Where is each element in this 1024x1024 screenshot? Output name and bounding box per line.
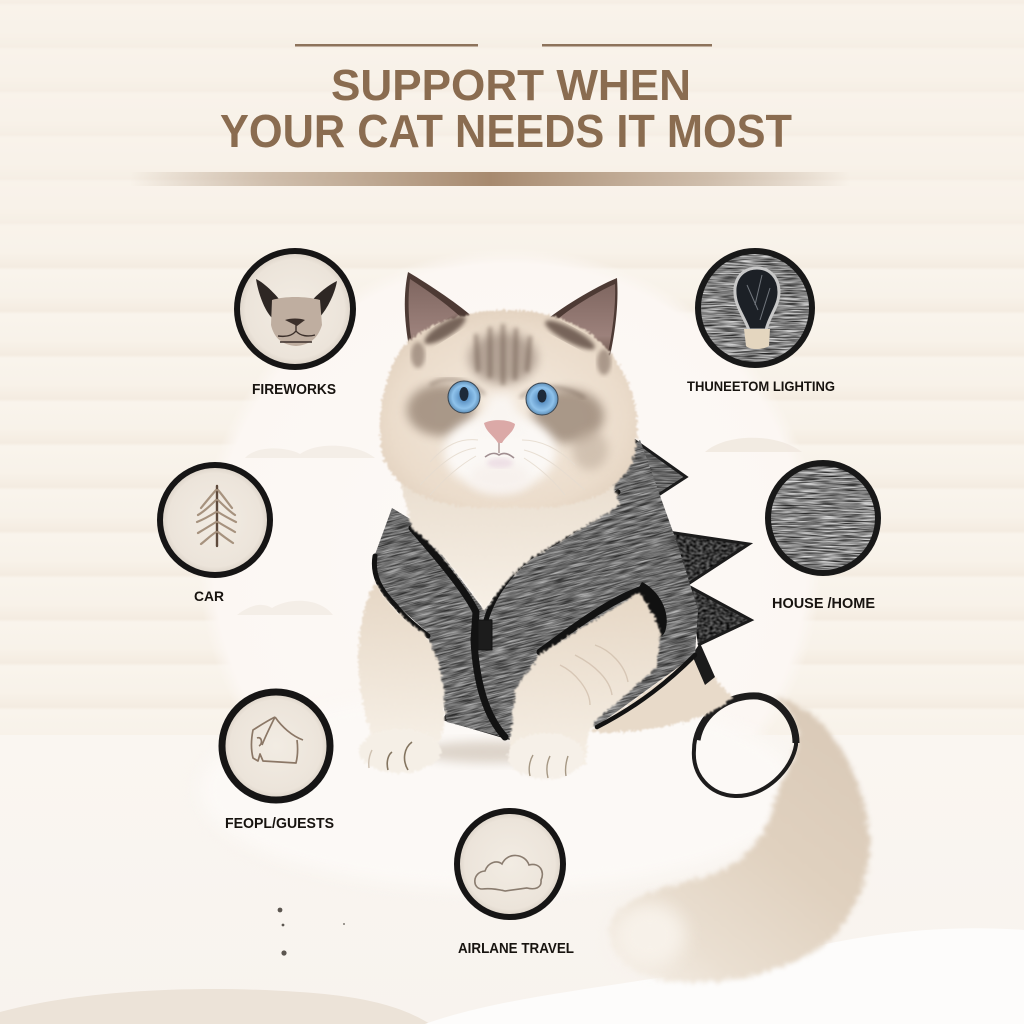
label: house and home: HOUSE /HOME (772, 595, 875, 612)
chest fur (400, 470, 620, 612)
icon: light bulb (735, 268, 779, 349)
icon badge: fireworks (237, 251, 353, 367)
arm hole dark (636, 582, 667, 637)
white muzzle (444, 395, 556, 494)
right leg and belly (508, 592, 660, 765)
label: airplane travel: AIRLANE TRAVEL (458, 940, 574, 957)
speckles (278, 908, 345, 956)
label: thunderstorm lightning: THUNEETOM LIGHTING (687, 379, 835, 394)
vest black piping (374, 492, 695, 737)
cat ears (405, 272, 618, 365)
icon badge: airplane travel (457, 811, 563, 917)
cat body (357, 438, 754, 780)
title block (130, 44, 850, 186)
icon badge: car (160, 465, 270, 575)
vest fabric (375, 440, 698, 738)
vest under-edge shadow (442, 708, 510, 740)
ear shadow points (421, 311, 469, 349)
nose and mouth (484, 420, 515, 468)
back fins (634, 438, 754, 685)
icon: cat face (256, 279, 337, 346)
whiskers (420, 440, 585, 495)
left leg (358, 582, 445, 742)
icon badge: people and guests (222, 692, 330, 800)
icon: cloud (475, 855, 542, 891)
icon badge: house and home (765, 462, 883, 578)
icon badge: thunderstorm lightning (695, 250, 815, 370)
title block: YOUR CAT NEEDS IT MOST (220, 105, 792, 157)
icon: tree (197, 486, 236, 546)
label: car: CAR (194, 588, 224, 604)
face mask (407, 324, 608, 470)
label: fireworks: FIREWORKS (252, 381, 336, 398)
icon: tent (252, 717, 303, 763)
cat tail (610, 697, 869, 983)
right paw (508, 733, 584, 779)
eyes (448, 381, 558, 415)
floor shadow (420, 741, 560, 763)
title block: SUPPORT WHEN (331, 61, 691, 110)
cat head (380, 310, 637, 508)
tail ring accessory (694, 696, 796, 796)
haunch behind vest (590, 655, 732, 732)
left paw (359, 729, 441, 773)
label: people and guests: FEOPL/GUESTS (225, 815, 334, 832)
